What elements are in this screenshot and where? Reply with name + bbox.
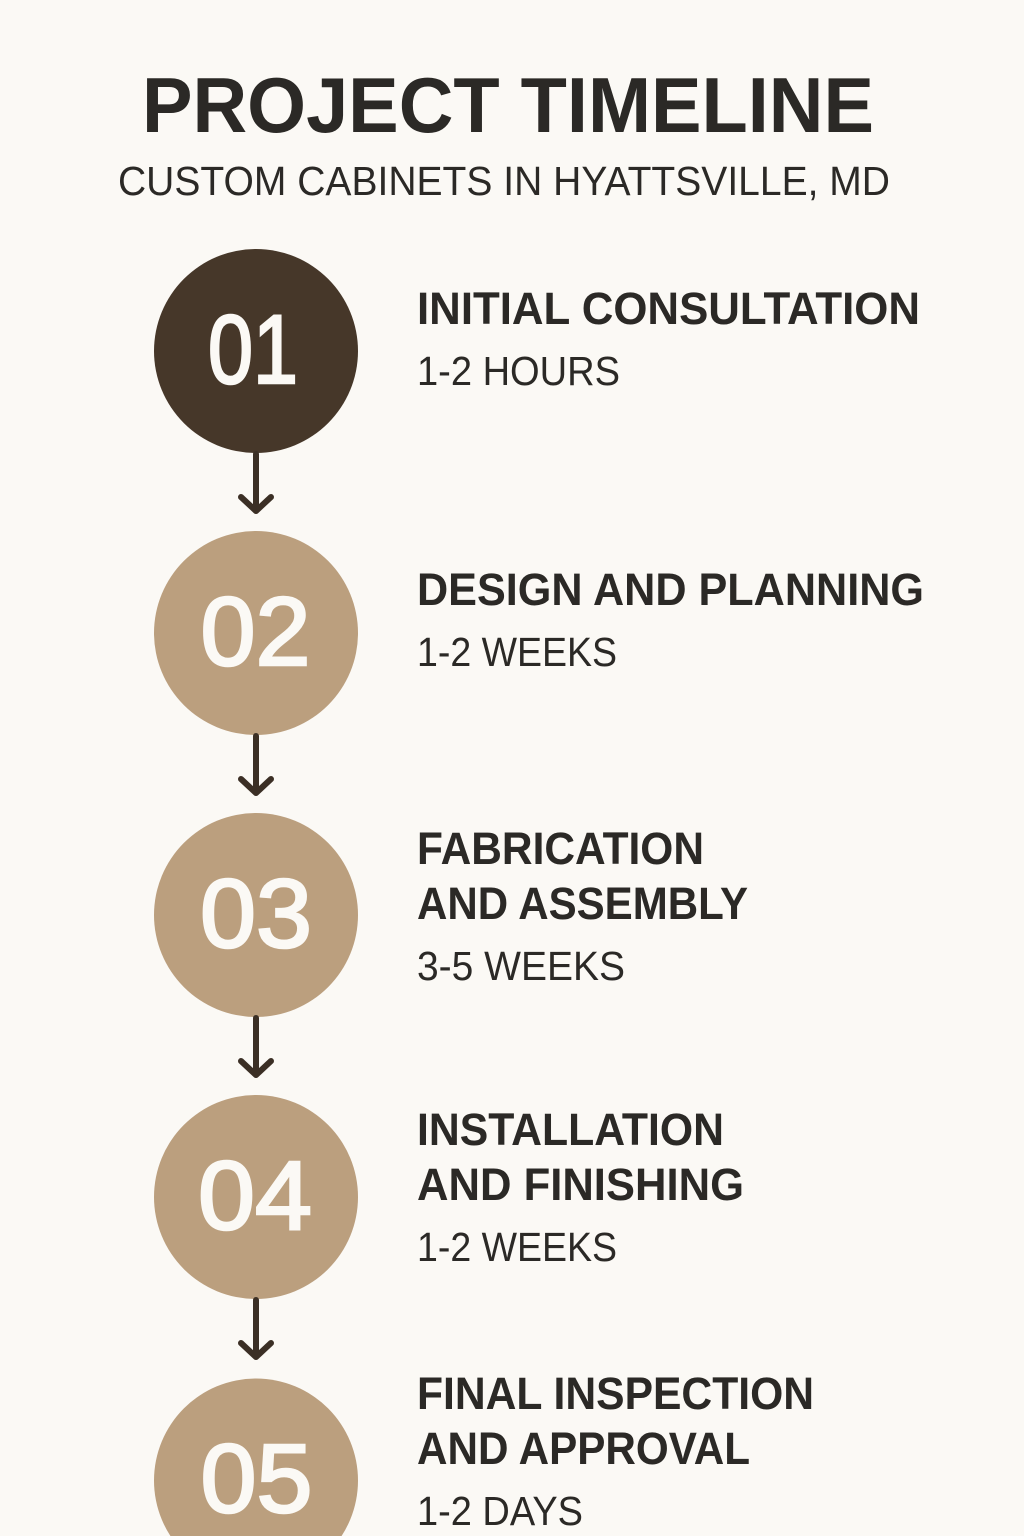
step 1 text: [417, 283, 920, 394]
subtitle: CUSTOM CABINETS IN HYATTSVILLE, MD: [118, 158, 890, 204]
step 5 text: FINAL INSPECTION: [417, 1368, 814, 1419]
step 3 text: 3-5 WEEKS: [417, 943, 625, 989]
step 4 circle: 04: [198, 1141, 312, 1250]
step 4 text: INSTALLATION: [417, 1104, 724, 1155]
step 5 text: 1-2 DAYS: [417, 1488, 583, 1534]
step 2 circle: [154, 531, 358, 735]
step 5 text: [417, 1368, 814, 1534]
step 4 text: 1-2 WEEKS: [417, 1224, 617, 1270]
title: PROJECT TIMELINE: [142, 61, 874, 149]
step 4 circle: [154, 1095, 358, 1299]
step 5 circle: 05: [200, 1424, 312, 1533]
step 4 text: AND FINISHING: [417, 1159, 744, 1210]
step 5 text: AND APPROVAL: [417, 1423, 750, 1474]
step 1 text: 1-2 HOURS: [417, 348, 620, 394]
arrow 4 to 5: [241, 1300, 271, 1357]
arrow 2 to 3: [241, 736, 271, 793]
step 3 circle: [154, 813, 358, 1017]
step 3 text: AND ASSEMBLY: [417, 878, 748, 929]
step 3 text: FABRICATION: [417, 823, 704, 874]
step 3 circle: 03: [200, 859, 312, 968]
step 2 text: DESIGN AND PLANNING: [417, 564, 924, 615]
arrow 3 to 4: [241, 1018, 271, 1075]
step 1 circle: [154, 249, 358, 453]
step 2 circle: 02: [200, 577, 310, 686]
step 2 text: [417, 564, 924, 675]
step 2 text: 1-2 WEEKS: [417, 629, 617, 675]
step 3 text: [417, 823, 748, 989]
step 1 circle: 01: [208, 295, 298, 404]
step 5 circle: [154, 1378, 358, 1536]
arrow 1 to 2: [241, 454, 271, 511]
step 1 text: INITIAL CONSULTATION: [417, 283, 920, 334]
step 4 text: [417, 1104, 744, 1270]
